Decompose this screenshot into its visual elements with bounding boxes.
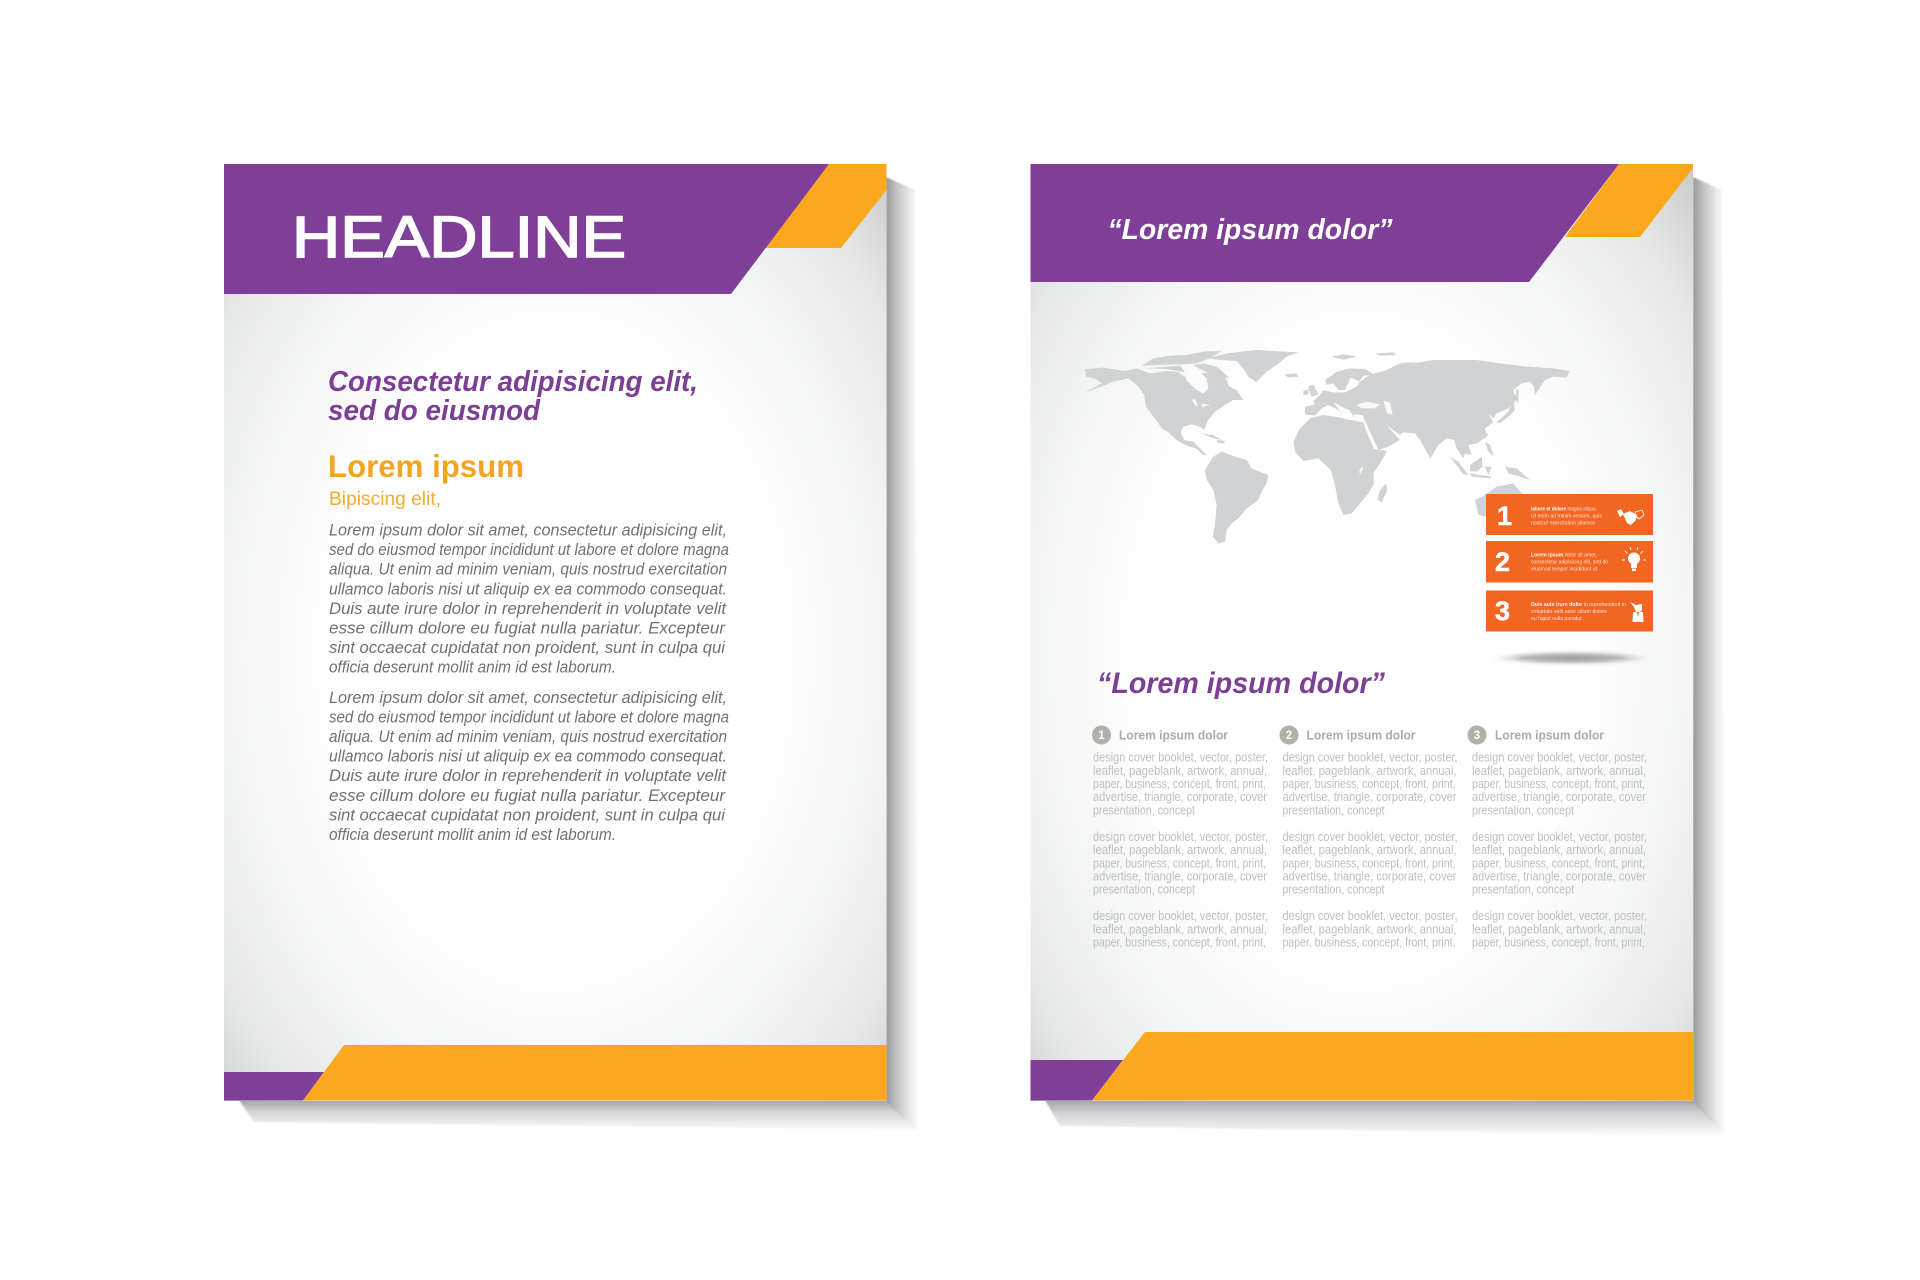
greenland: [1208, 350, 1298, 382]
body paragraph 2: sed do eiusmod tempor incididunt ut labore et dolore magna: [329, 708, 729, 726]
madagascar: [1378, 483, 1387, 502]
section title: “Lorem ipsum dolor”: [1097, 667, 1385, 700]
column text: advertise, triangle, corporate, cover: [1282, 790, 1456, 804]
small asian islands: [1429, 432, 1494, 458]
callout 3: 3: [1495, 596, 1510, 626]
body paragraph 1: ullamco laboris nisi ut aliquip ex ea commodo consequat.: [329, 580, 727, 598]
column text: advertise, triangle, corporate, cover: [1282, 869, 1456, 883]
header quote: “Lorem ipsum dolor”: [1108, 214, 1393, 246]
column text: paper, business, concept, front, print,: [1282, 856, 1456, 870]
callout 1: nostrud exercitation ullamco: [1531, 520, 1595, 526]
column text: design cover booklet, vector, poster,: [1093, 751, 1268, 765]
icon: graduate: [1630, 602, 1644, 622]
headline: HEADLINE: [292, 205, 626, 270]
body paragraph 1: [329, 522, 729, 677]
column text: design cover booklet, vector, poster,: [1472, 909, 1647, 923]
callout 1: labore et dolore magna aliqua.: [1531, 506, 1597, 512]
column text: paper, business, concept, front, print,: [1472, 777, 1645, 791]
world map: [1083, 350, 1569, 543]
column text: [1472, 751, 1647, 950]
column text: presentation, concept: [1282, 803, 1385, 817]
callout 3: [1486, 590, 1653, 632]
callout 2: 2: [1495, 547, 1510, 577]
column text: advertise, triangle, corporate, cover: [1093, 869, 1267, 883]
column text: design cover booklet, vector, poster,: [1472, 830, 1647, 844]
callout 3: Duis aute irure dolor in reprehenderit in: [1531, 602, 1626, 608]
callout 1: [1486, 494, 1653, 535]
panel: right brochure page: [1030, 164, 1724, 1136]
column text: advertise, triangle, corporate, cover: [1472, 869, 1646, 883]
column text: [1282, 751, 1458, 950]
body paragraph 2: [329, 689, 729, 844]
column heading: Lorem ipsum dolor: [1495, 728, 1604, 742]
column heading: [1468, 726, 1604, 744]
header orange accent: [765, 164, 886, 248]
body paragraph 1: sint occaecat cupidatat non proident, sunt in culpa qui: [329, 639, 726, 657]
column text: [1093, 751, 1268, 950]
column 1: [1092, 726, 1268, 950]
body paragraph 1: sed do eiusmod tempor incididunt ut labore et dolore magna: [329, 541, 729, 559]
callout 2: Lorem ipsum dolor sit amet,: [1531, 553, 1597, 559]
column text: leaflet, pageblank, artwork, annual,: [1282, 764, 1456, 778]
column text: leaflet, pageblank, artwork, annual,: [1472, 764, 1646, 778]
callout 2: eiusmod tempor incididunt ut: [1531, 567, 1597, 573]
north america: [1083, 368, 1243, 455]
body paragraph 1: Duis aute irure dolor in reprehenderit in voluptate velit: [329, 600, 727, 618]
column heading: 1: [1098, 730, 1105, 742]
scandinavia: [1325, 368, 1375, 390]
page sheet: [224, 164, 886, 1101]
column heading: [1280, 726, 1416, 744]
australia: [1475, 483, 1540, 517]
column text: leaflet, pageblank, artwork, annual,: [1472, 922, 1646, 936]
great lakes: [1156, 399, 1210, 435]
africa: [1293, 415, 1387, 515]
column text: paper, business, concept, front, print,: [1282, 777, 1456, 791]
iceland: [1284, 373, 1298, 378]
column heading: 3: [1474, 730, 1480, 742]
body paragraph 1: Lorem ipsum dolor sit amet, consectetur adipisicing elit,: [329, 522, 727, 540]
uk and ireland: [1303, 384, 1318, 397]
column text: design cover booklet, vector, poster,: [1282, 751, 1458, 765]
callout 1: 1: [1497, 501, 1512, 531]
japan and sakhalin: [1497, 389, 1519, 423]
column heading: 2: [1286, 730, 1292, 742]
column text: leaflet, pageblank, artwork, annual,: [1093, 843, 1267, 857]
column text: design cover booklet, vector, poster,: [1282, 909, 1458, 923]
subtitle: sed do eiusmod: [328, 395, 541, 427]
column text: design cover booklet, vector, poster,: [1282, 830, 1458, 844]
body paragraph 1: aliqua. Ut enim ad minim veniam, quis nostrud exercitation: [329, 561, 727, 579]
column text: paper, business, concept, front, print,: [1472, 936, 1645, 950]
eurasia: [1305, 360, 1569, 458]
callout 2: [1486, 541, 1653, 582]
panel: left brochure page: [224, 164, 917, 1130]
column text: leaflet, pageblank, artwork, annual,: [1093, 764, 1267, 778]
column heading: [1092, 726, 1228, 744]
subtitle: Consectetur adipisicing elit,: [328, 366, 698, 398]
page shadow: [239, 177, 917, 1130]
footer purple strip: [1030, 1060, 1123, 1100]
subtitle: [328, 366, 698, 427]
americas: [1083, 350, 1298, 543]
arctic islands: [1142, 351, 1230, 378]
column text: presentation, concept: [1282, 883, 1385, 897]
body paragraph 2: aliqua. Ut enim ad minim veniam, quis nostrud exercitation: [329, 728, 727, 746]
icon: handshake: [1617, 509, 1644, 525]
column heading: Lorem ipsum dolor: [1119, 728, 1228, 742]
orange subheading: Bipiscing elit,: [329, 488, 441, 510]
callout 3: eu fugiat nulla pariatur.: [1531, 616, 1583, 622]
eurasia and africa: [1293, 352, 1569, 517]
caribbean: [1202, 433, 1225, 443]
body paragraph 2: esse cillum dolore eu fugiat nulla pariatur. Excepteur: [329, 787, 727, 805]
column text: paper, business, concept, front, print,: [1093, 936, 1266, 950]
footer orange band: [303, 1045, 886, 1100]
column text: presentation, concept: [1093, 803, 1195, 817]
column text: leaflet, pageblank, artwork, annual,: [1282, 922, 1456, 936]
column 3: [1468, 726, 1647, 950]
body paragraph 2: Lorem ipsum dolor sit amet, consectetur adipisicing elit,: [329, 689, 727, 707]
page sheet: [1030, 164, 1693, 1101]
column text: design cover booklet, vector, poster,: [1472, 751, 1647, 765]
inland seas: [1357, 401, 1393, 474]
callout 2: consectetur adipisicing elit, sed do: [1531, 560, 1608, 566]
column text: leaflet, pageblank, artwork, annual,: [1282, 843, 1456, 857]
body paragraph 2: ullamco laboris nisi ut aliquip ex ea commodo consequat.: [329, 748, 727, 766]
body paragraph 2: officia deserunt mollit anim id est laborum.: [329, 826, 616, 844]
page shadow: [1045, 177, 1724, 1136]
footer orange band: [1092, 1032, 1693, 1100]
column text: design cover booklet, vector, poster,: [1093, 830, 1268, 844]
column text: leaflet, pageblank, artwork, annual,: [1472, 843, 1646, 857]
column text: paper, business, concept, front, print,: [1282, 936, 1456, 950]
column text: paper, business, concept, front, print,: [1093, 856, 1266, 870]
callout shadow: [1488, 651, 1656, 665]
callout 1: Ut enim ad minim veniam, quis: [1531, 514, 1602, 520]
column text: presentation, concept: [1472, 883, 1574, 897]
column text: paper, business, concept, front, print,: [1472, 856, 1645, 870]
column text: presentation, concept: [1472, 803, 1574, 817]
column text: design cover booklet, vector, poster,: [1093, 909, 1268, 923]
column text: presentation, concept: [1093, 883, 1195, 897]
callout 3: voluptate velit esse cillum dolore: [1531, 609, 1607, 615]
body paragraph 1: officia deserunt mollit anim id est laborum.: [329, 659, 616, 677]
orange heading: Lorem ipsum: [328, 448, 524, 484]
column text: advertise, triangle, corporate, cover: [1093, 790, 1267, 804]
column heading: Lorem ipsum dolor: [1306, 728, 1416, 742]
column text: advertise, triangle, corporate, cover: [1472, 790, 1646, 804]
column text: paper, business, concept, front, print,: [1093, 777, 1266, 791]
icon: light bulb: [1622, 547, 1646, 571]
indonesia and new guinea: [1450, 457, 1530, 480]
column text: leaflet, pageblank, artwork, annual,: [1093, 922, 1267, 936]
body paragraph 1: esse cillum dolore eu fugiat nulla pariatur. Excepteur: [329, 620, 727, 638]
footer purple strip: [224, 1072, 324, 1100]
south america: [1205, 452, 1268, 543]
header orange accent: [1565, 164, 1693, 237]
body paragraph 2: Duis aute irure dolor in reprehenderit in voluptate velit: [329, 767, 727, 785]
column 2: [1280, 726, 1458, 950]
body paragraph 2: sint occaecat cupidatat non proident, sunt in culpa qui: [329, 806, 726, 824]
arctic russia islands: [1332, 352, 1417, 368]
header purple banner: [1030, 164, 1619, 282]
header purple banner: [224, 164, 829, 294]
